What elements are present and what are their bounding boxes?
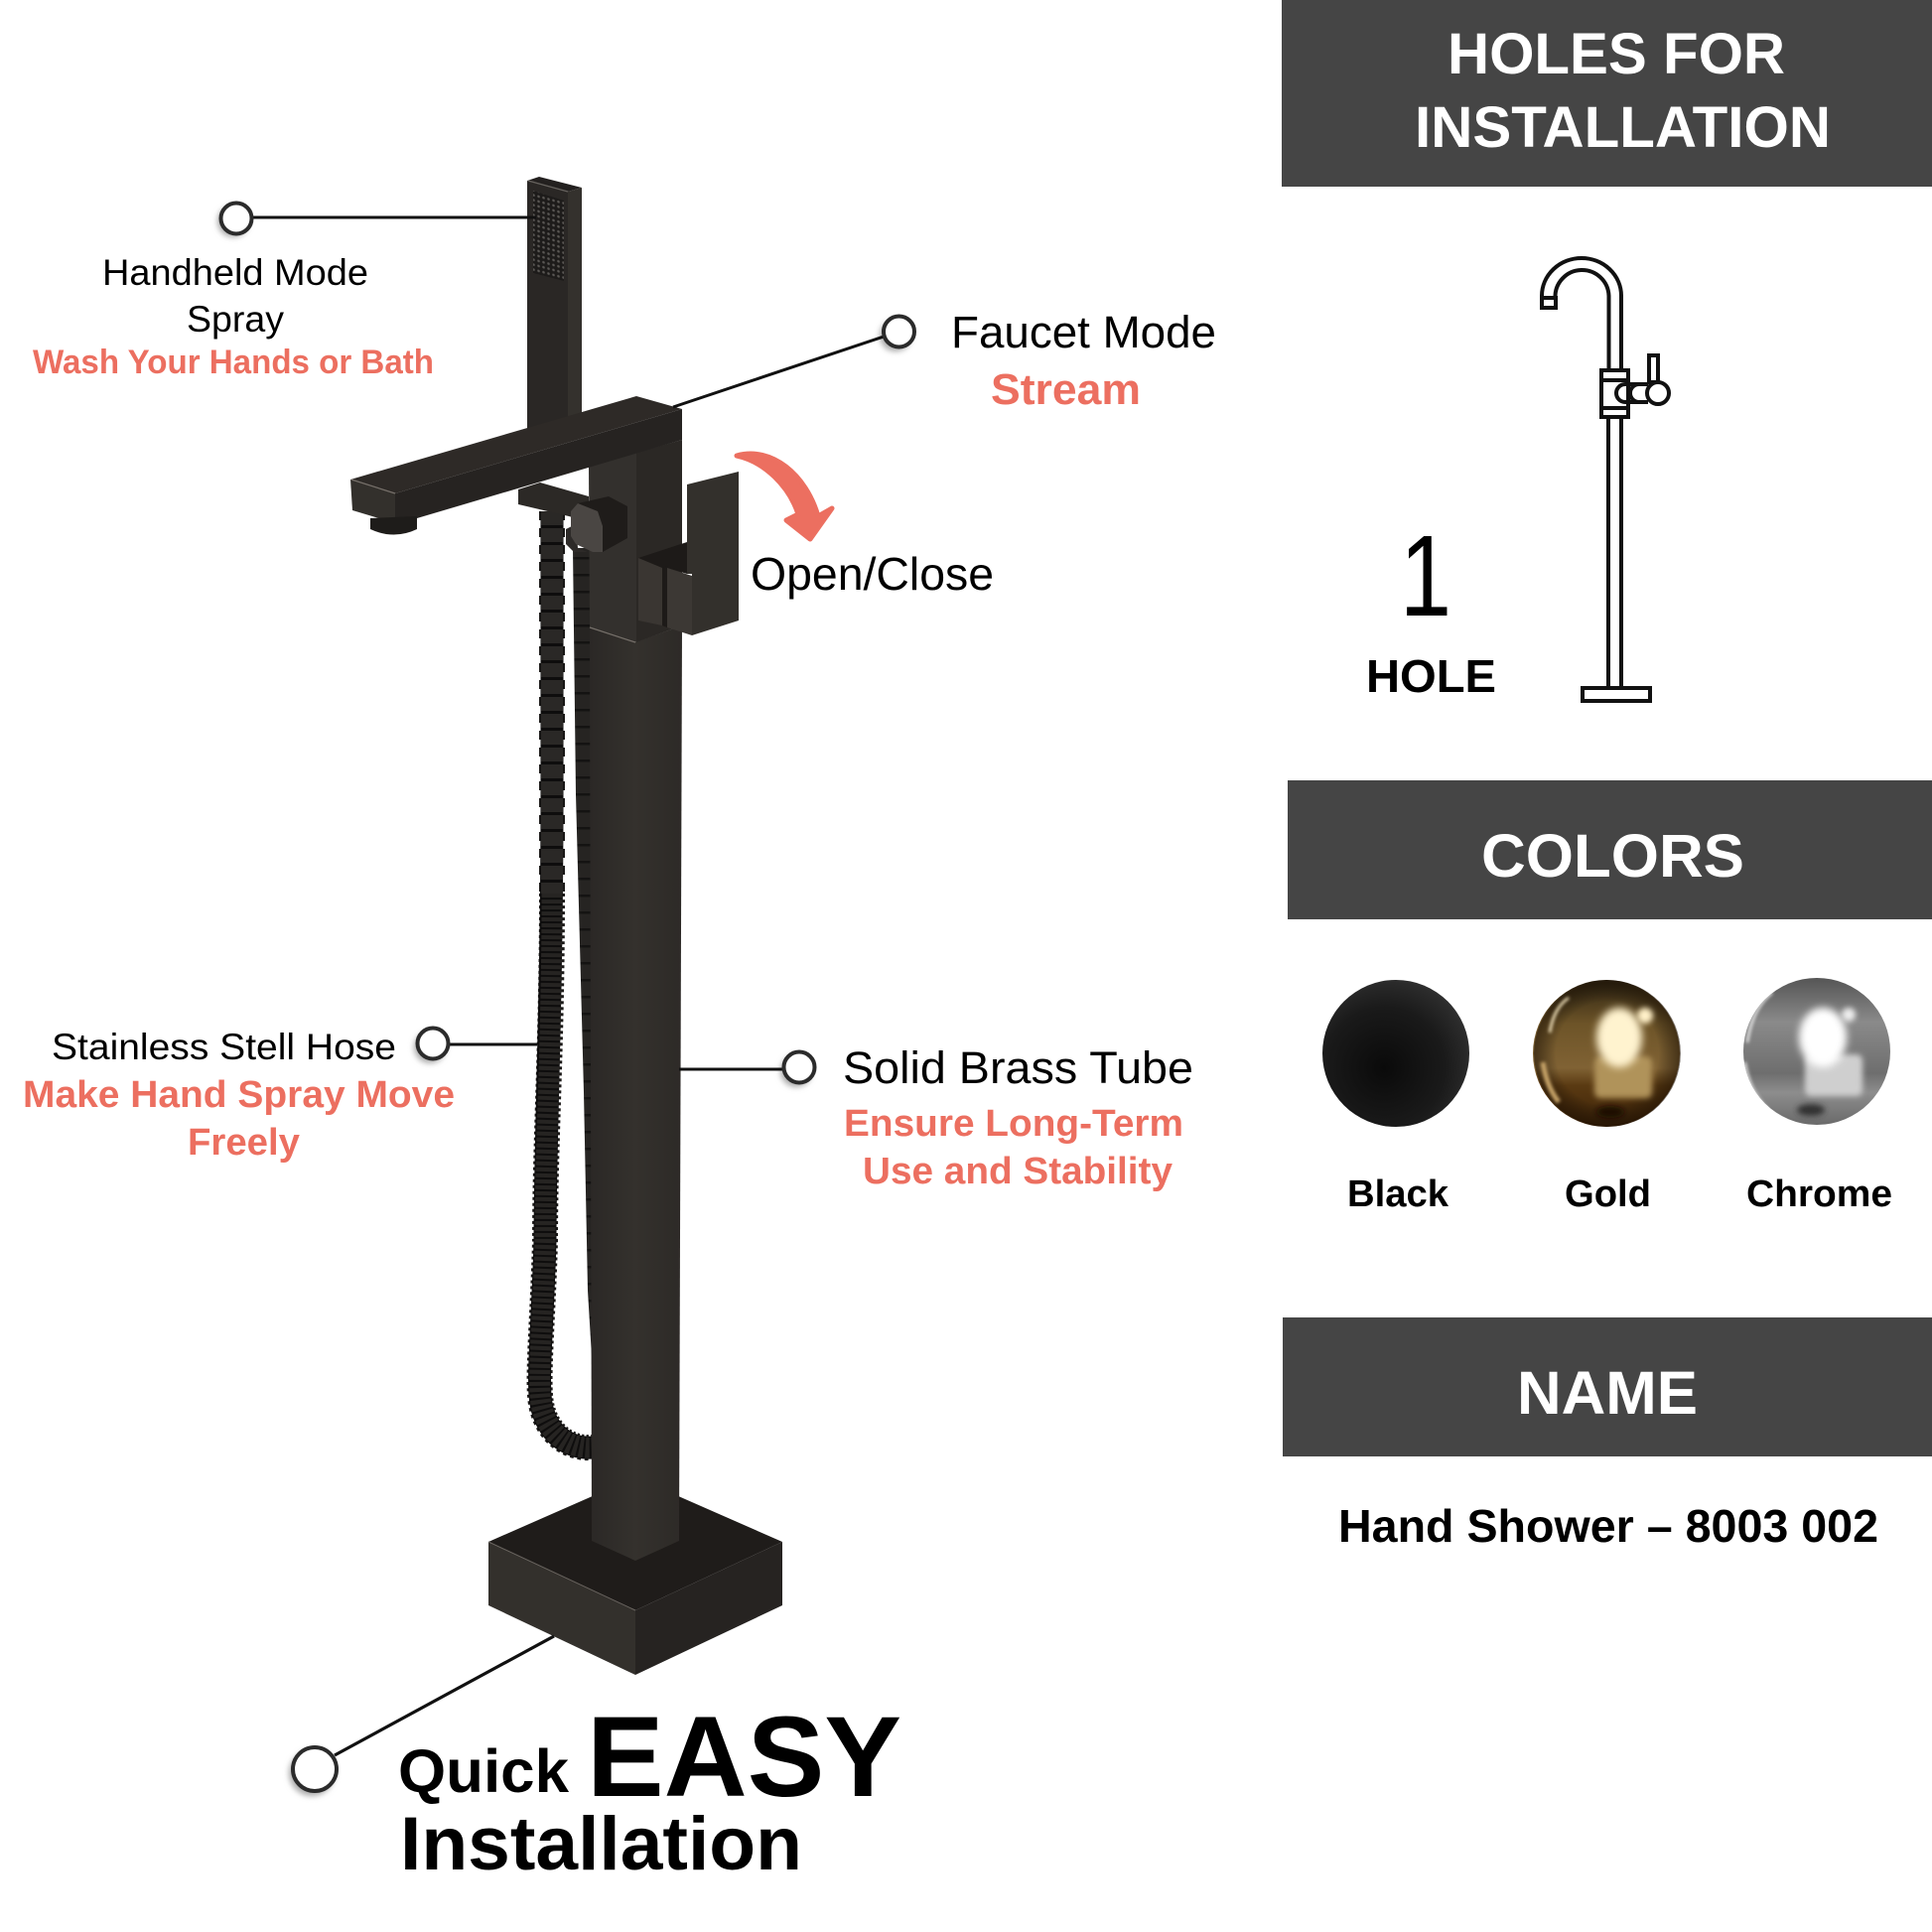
heading: name: NAME [1517, 1359, 1698, 1427]
swatch: gold: Gold [1565, 1173, 1651, 1215]
heading: colors [1288, 780, 1932, 919]
callout: solid brass tube: Use and Stability [863, 1151, 1173, 1192]
callout: quick easy installation: EASY [587, 1694, 901, 1821]
callout: handheld mode spray: Spray [187, 299, 285, 340]
icon: single hole faucet outline [1542, 258, 1669, 701]
hole count: 1 [1400, 511, 1451, 640]
heading: colors: COLORS [1481, 822, 1744, 890]
callout: solid brass tube: Ensure Long-Term [844, 1103, 1183, 1145]
spout bar [350, 396, 682, 534]
lever handle [638, 472, 739, 635]
callout: quick easy installation: Installation [400, 1802, 802, 1886]
callout: quick easy installation [289, 1636, 901, 1886]
swatch: chrome: Chrome [1746, 1173, 1892, 1215]
faucet base block [488, 1477, 782, 1675]
callout: handheld mode spray: Wash Your Hands or Bath [33, 344, 434, 381]
callout: stainless steel hose: Stainless Stell Hose [52, 1027, 396, 1067]
hole count: HOLE [1366, 650, 1496, 702]
swatch: chrome [1743, 978, 1892, 1215]
vertical brass tube [488, 625, 782, 1675]
callout: handheld mode spray [33, 203, 536, 381]
product name: Hand Shower – 8003 002 [1338, 1500, 1878, 1552]
callout: faucet mode stream: Stream [991, 365, 1141, 414]
heading: holes for installation [1282, 0, 1932, 187]
callout: stainless steel hose [23, 1027, 537, 1164]
callout: solid brass tube [679, 1042, 1193, 1192]
heading: holes for installation: HOLES FOR [1448, 22, 1785, 86]
right flexible hose [573, 548, 594, 1390]
diverter knob [566, 496, 627, 552]
callout: quick easy installation: Quick [398, 1737, 569, 1805]
faucet product illustration [350, 177, 782, 1675]
callout: handheld mode spray: Handheld Mode [102, 252, 368, 293]
swatch: gold [1533, 980, 1681, 1215]
hand shower holder bracket [518, 483, 589, 522]
hole count [1366, 511, 1496, 702]
swatch: black: Black [1347, 1173, 1449, 1215]
heading: name [1283, 1317, 1932, 1456]
left flexible hose [540, 511, 593, 1448]
callout: solid brass tube: Solid Brass Tube [843, 1042, 1193, 1093]
arrow: open close rotation [737, 454, 832, 539]
callout: stainless steel hose: Freely [188, 1122, 300, 1164]
callout: faucet mode stream: Faucet Mode [951, 307, 1216, 357]
swatch: black [1322, 980, 1469, 1215]
hand shower head [527, 177, 582, 437]
callout: faucet mode stream [673, 307, 1216, 414]
label: open close: Open/Close [751, 548, 994, 600]
upper valve body [589, 440, 682, 642]
heading: holes for installation: INSTALLATION [1415, 95, 1831, 160]
callout: stainless steel hose: Make Hand Spray Move [23, 1074, 455, 1116]
